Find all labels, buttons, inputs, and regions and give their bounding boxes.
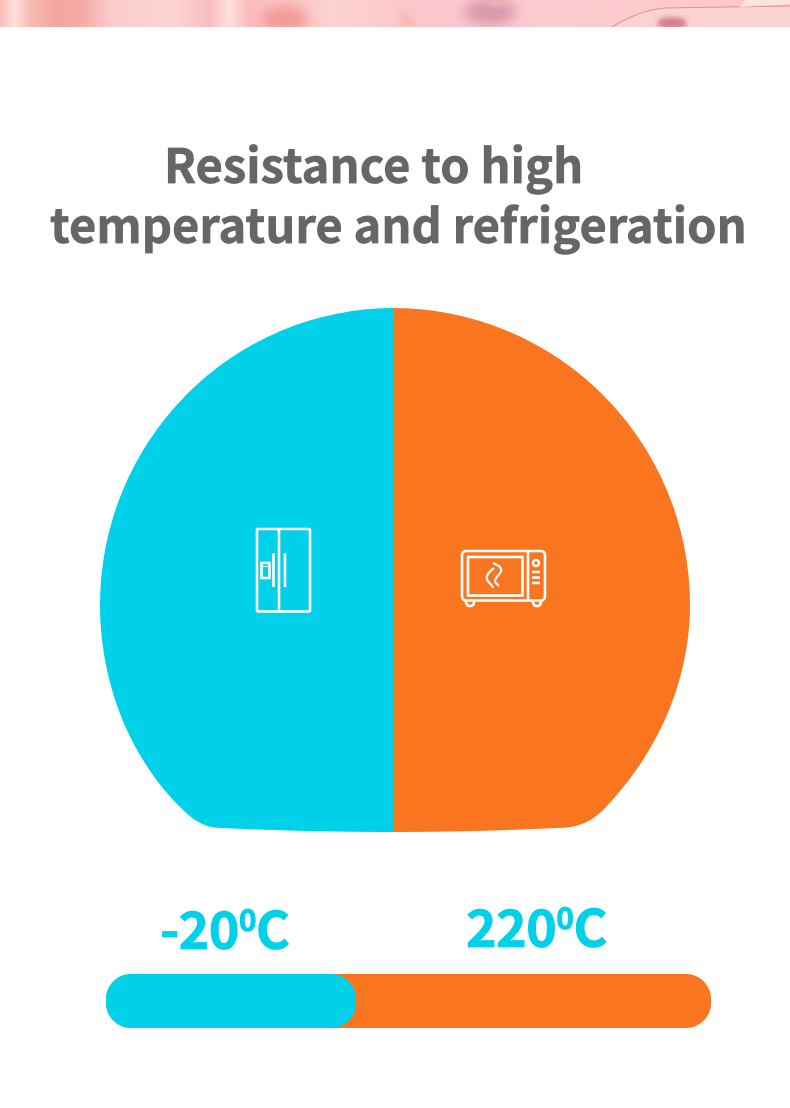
icon: microwave	[462, 551, 545, 606]
title: temperature and refrigeration	[50, 188, 747, 257]
panel: hot half	[393, 308, 690, 832]
icon: refrigerator	[257, 529, 310, 612]
title: Resistance to high	[164, 128, 583, 197]
label: hot temperature: 2200C	[466, 887, 607, 962]
progress bar: cold segment	[106, 974, 356, 1028]
banner: pink silk fabric	[0, 0, 790, 27]
panel: cold half	[100, 308, 394, 832]
chart: split rounded dome	[100, 308, 690, 832]
title	[50, 128, 747, 257]
progress bar	[106, 974, 711, 1028]
label: cold temperature: -200C	[160, 889, 289, 964]
